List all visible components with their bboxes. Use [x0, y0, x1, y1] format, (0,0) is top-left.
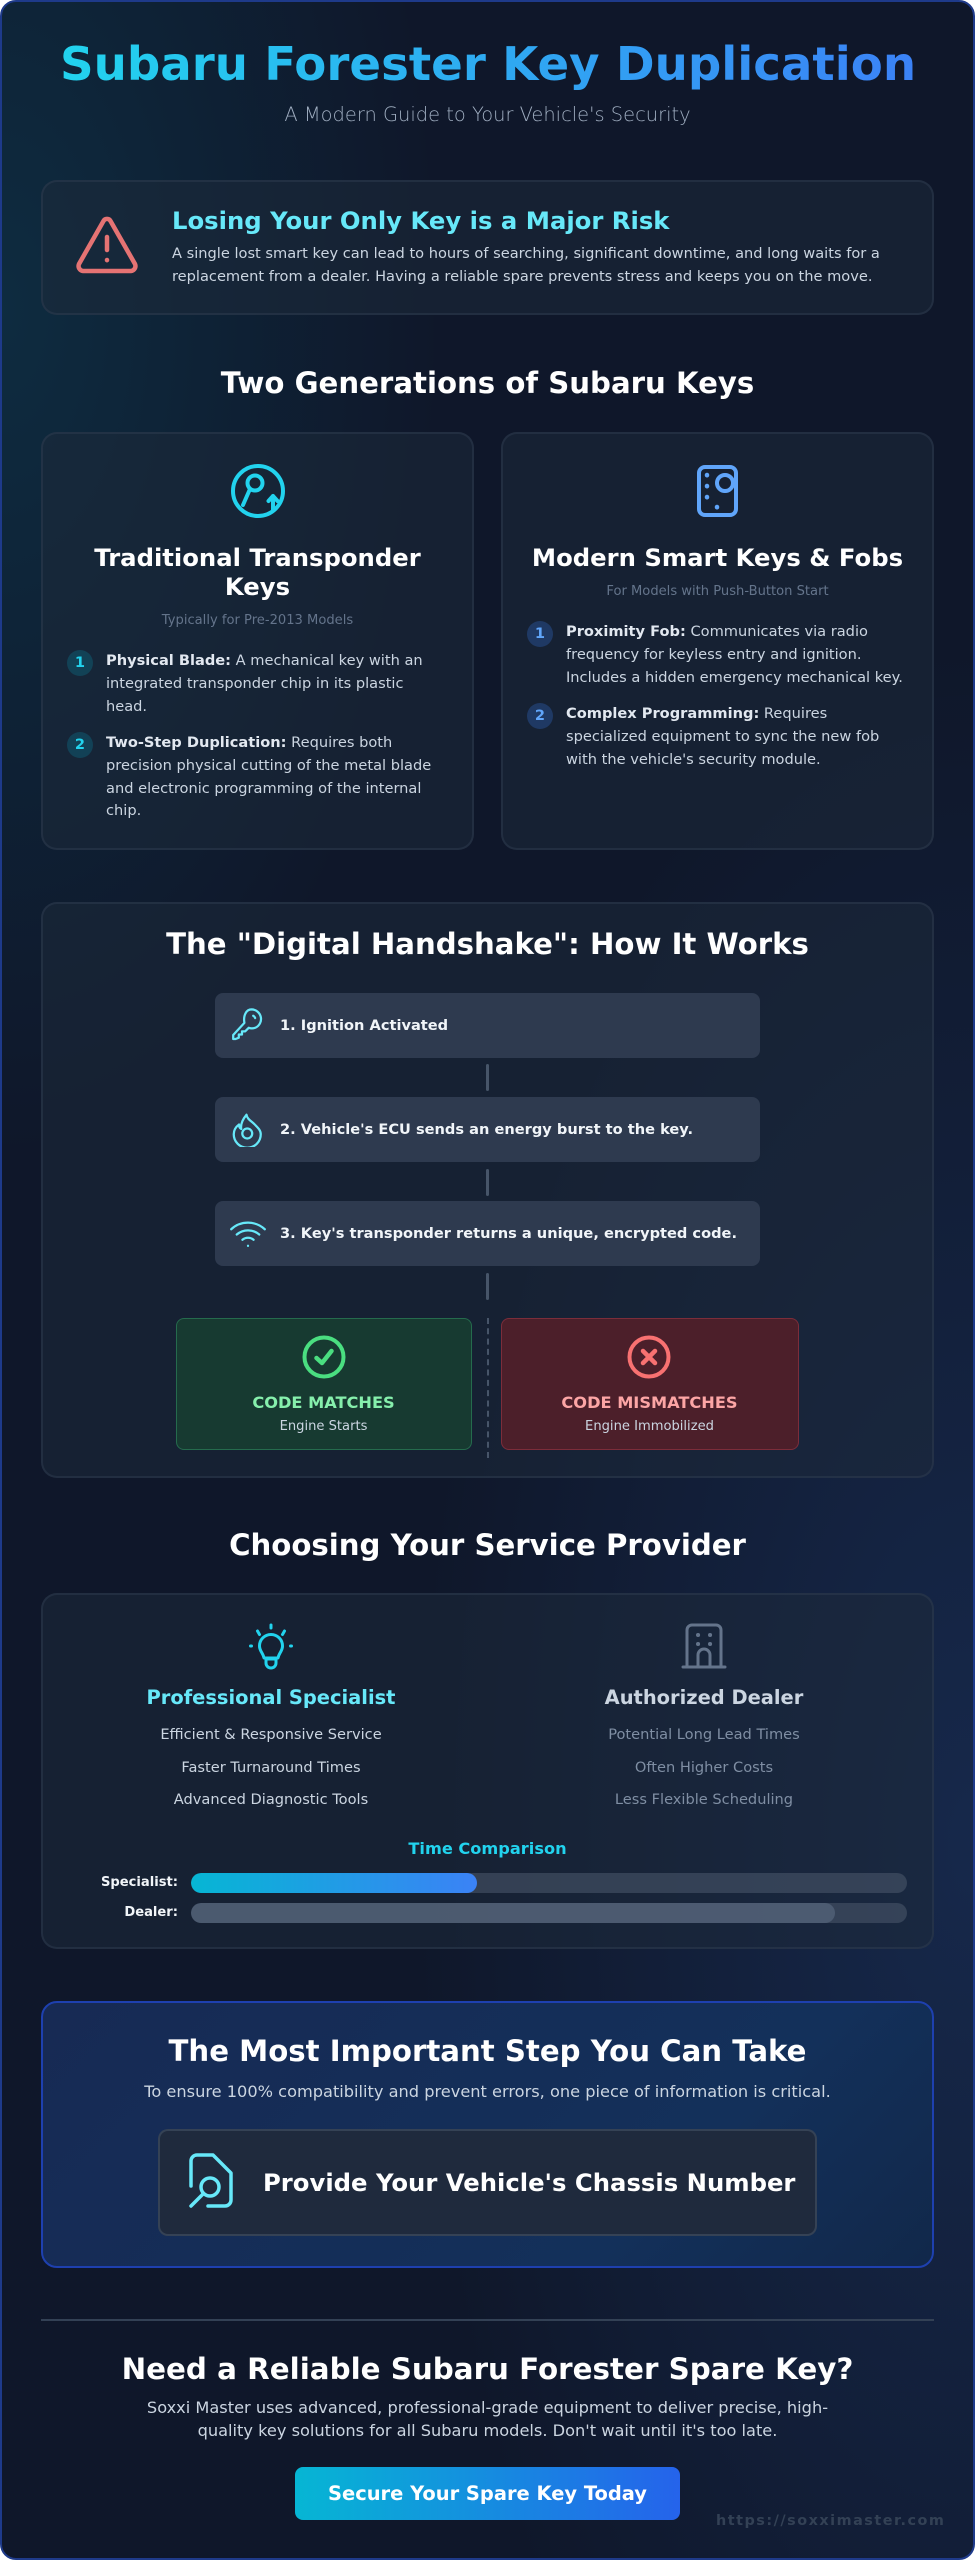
result caption: Engine Starts [280, 1419, 367, 1434]
heading: Traditional Transponder [94, 543, 421, 572]
panel: most important step [41, 2001, 934, 2268]
footer divider [41, 2319, 934, 2321]
heading: service provider: Choosing Your Service Provider [229, 1528, 746, 1562]
number badge: 1 [75, 654, 85, 671]
footer text [147, 2398, 828, 2440]
panel: traditional transponder keys [41, 432, 474, 850]
text: Includes a hidden emergency mechanical key. [566, 669, 903, 686]
bar chart: dealer [124, 1903, 907, 1923]
text: and electronic programming of the internal [106, 780, 421, 797]
icon: wifi [230, 1222, 266, 1247]
item 1 [527, 621, 903, 686]
footer text: Soxxi Master uses advanced, professional-grade equipment to deliver precise, high- [147, 2398, 828, 2417]
number badge [527, 621, 553, 647]
result title: CODE MISMATCHES [561, 1393, 738, 1412]
icon: key [232, 1008, 262, 1040]
footer [122, 2352, 853, 2520]
dealer point 1: Potential Long Lead Times [608, 1726, 800, 1743]
bar [191, 1873, 907, 1893]
text: Complex Programming: Requires [566, 705, 827, 722]
heading [94, 543, 421, 601]
item 2 [67, 732, 431, 819]
dealer point 3: Less Flexible Scheduling [615, 1791, 793, 1808]
dealer point 2: Often Higher Costs [635, 1759, 773, 1776]
text: specialized equipment to sync the new fob [566, 728, 879, 745]
footer heading: Need a Reliable Subaru Forester Spare Key? [122, 2352, 853, 2386]
panel: risk alert [41, 180, 934, 315]
step 2 [215, 1097, 760, 1162]
result: code mismatches [501, 1318, 799, 1450]
icon: document search [189, 2153, 233, 2208]
icon: check [302, 1336, 346, 1378]
panel: modern smart keys [501, 432, 934, 850]
text [566, 623, 903, 686]
result title: CODE MATCHES [252, 1393, 395, 1412]
alert text [172, 245, 880, 285]
dealer heading: Authorized Dealer [605, 1686, 803, 1709]
panel: service providers [41, 1593, 934, 1949]
number badge [67, 732, 93, 758]
icon: smart fob [697, 465, 738, 517]
alert text: A single lost smart key can lead to hours of searching, significant downtime, and long waits for a [172, 245, 880, 262]
text: Proximity Fob: Communicates via radio [566, 623, 868, 640]
caption: For Models with Push-Button Start [606, 584, 829, 599]
icon: energy flame [232, 1114, 262, 1147]
number badge [67, 650, 93, 676]
icon: warning triangle [76, 216, 138, 274]
subtitle: A Modern Guide to Your Vehicle's Security [284, 103, 691, 126]
header [60, 38, 916, 126]
heading: digital handshake: The "Digital Handshake": How It Works [166, 927, 809, 961]
website url: https://soxximaster.com [716, 2513, 945, 2529]
label: 3. Key's transponder returns a unique, encrypted code. [280, 1225, 737, 1242]
chart heading: Time Comparison [408, 1839, 567, 1858]
specialist point 2: Faster Turnaround Times [181, 1759, 361, 1776]
text: Two-Step Duplication: Requires both [106, 734, 392, 751]
text: head. [106, 698, 147, 715]
text: Physical Blade: A mechanical key with an [106, 652, 423, 669]
label: 1. Ignition Activated [280, 1017, 448, 1034]
specialist heading: Professional Specialist [147, 1686, 395, 1709]
heading: two generations: Two Generations of Subaru Keys [221, 366, 754, 400]
label: 2. Vehicle's ECU sends an energy burst to the key. [280, 1121, 693, 1138]
panel: digital handshake [41, 902, 934, 1478]
title: Subaru Forester Key Duplication [60, 38, 916, 92]
specialist point 1: Efficient & Responsive Service [160, 1726, 382, 1743]
callout text: Provide Your Vehicle's Chassis Number [263, 2168, 795, 2197]
result caption: Engine Immobilized [585, 1419, 714, 1434]
heading: Keys [225, 572, 290, 601]
caption: Typically for Pre-2013 Models [162, 613, 353, 628]
icon: building [682, 1624, 726, 1668]
number badge: 2 [535, 707, 545, 724]
text: frequency for keyless entry and ignition. [566, 646, 862, 663]
number badge [527, 703, 553, 729]
bar label: Specialist: [101, 1875, 178, 1890]
footer text: quality key solutions for all Subaru models. Don't wait until it's too late. [198, 2421, 777, 2440]
text: chip. [106, 802, 141, 819]
alert text: replacement from a dealer. Having a reliable spare prevents stress and keeps you on the move. [172, 268, 872, 285]
step 1 [215, 993, 760, 1058]
specialist point 3: Advanced Diagnostic Tools [174, 1791, 368, 1808]
connector 3 [486, 1273, 489, 1300]
bar [191, 1903, 907, 1923]
button [295, 2467, 680, 2520]
button: Secure Your Spare Key Today [328, 2482, 647, 2505]
number badge: 2 [75, 736, 85, 753]
alert heading: Losing Your Only Key is a Major Risk [172, 206, 669, 235]
bar label: Dealer: [124, 1905, 178, 1920]
heading: The Most Important Step You Can Take [168, 2034, 806, 2068]
text [106, 652, 423, 715]
icon: cross [628, 1336, 670, 1378]
item 2 [527, 703, 879, 768]
connector 2 [486, 1169, 489, 1196]
number badge: 1 [535, 625, 545, 642]
dashed split line [486, 1318, 488, 1458]
heading: Modern Smart Keys & Fobs [532, 543, 903, 572]
text: To ensure 100% compatibility and prevent errors, one piece of information is critical. [144, 2082, 831, 2101]
icon: light bulb [249, 1624, 293, 1670]
text: with the vehicle's security module. [566, 751, 821, 768]
text [106, 734, 431, 819]
item 1 [67, 650, 423, 715]
bar chart: specialist [101, 1873, 907, 1893]
connector 1 [486, 1064, 489, 1091]
text: precision physical cutting of the metal blade [106, 757, 431, 774]
text [566, 705, 879, 768]
step 3 [215, 1201, 760, 1266]
icon: key in circle [231, 464, 285, 518]
chassis callout [158, 2129, 817, 2236]
result: code matches [176, 1318, 472, 1450]
text: integrated transponder chip in its plastic [106, 675, 404, 692]
